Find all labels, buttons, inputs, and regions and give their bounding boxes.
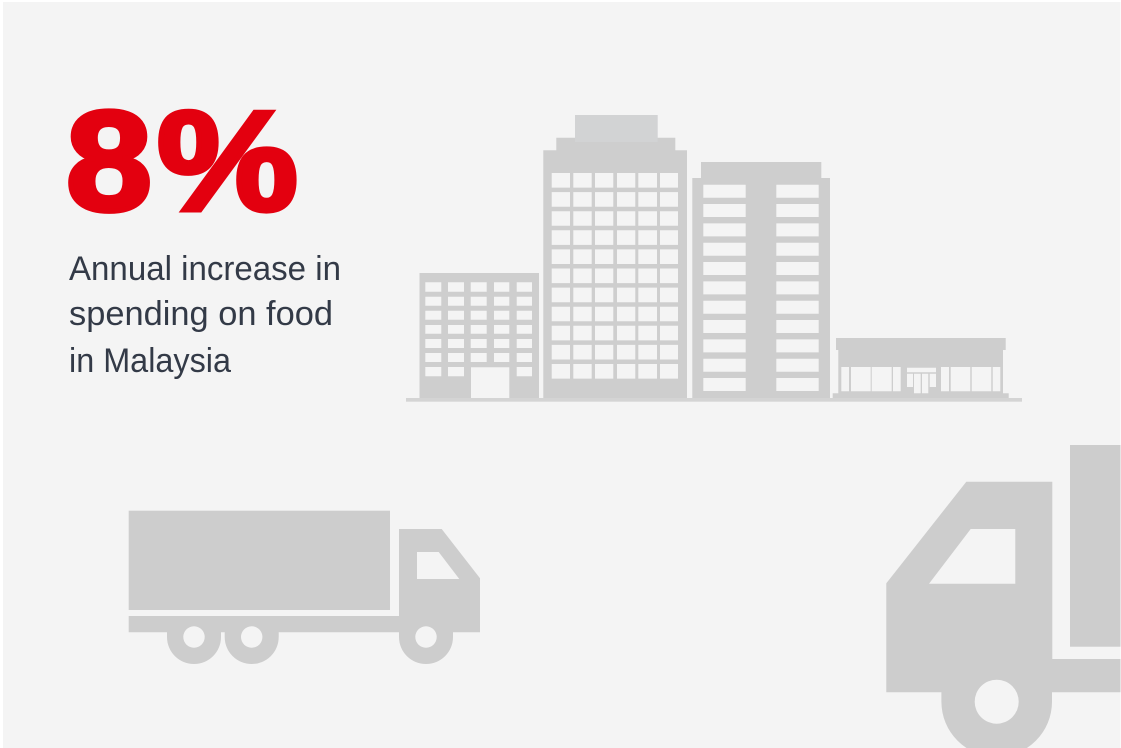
icon: enlarged truck cab cropped at the edge bbox=[886, 445, 1120, 748]
big number: 8%: 8 bbox=[66, 82, 152, 241]
building: shop bbox=[833, 338, 1009, 398]
text block: description: spending on food bbox=[69, 295, 333, 333]
icon: small delivery truck bbox=[129, 511, 480, 664]
cab and chassis bbox=[886, 482, 1120, 692]
building: right tower bbox=[692, 162, 830, 398]
text block: description bbox=[69, 250, 341, 380]
ground line bbox=[406, 398, 1022, 402]
cargo box bbox=[1070, 445, 1120, 647]
wheel hub bbox=[975, 680, 1019, 724]
text block: description: in Malaysia bbox=[69, 342, 231, 380]
truck cab and chassis bbox=[129, 529, 480, 632]
truck wheel hubs bbox=[183, 626, 437, 648]
building: central tower bbox=[543, 138, 687, 398]
icon: city buildings bbox=[406, 115, 1022, 402]
truck cargo box bbox=[129, 511, 390, 610]
truck wheels bbox=[167, 625, 453, 664]
building: left low-rise bbox=[420, 273, 539, 398]
big number: 8%: % bbox=[157, 82, 298, 241]
wheel bbox=[941, 685, 1052, 748]
text block: description: Annual increase in bbox=[69, 250, 341, 288]
tower rooftop bbox=[575, 115, 658, 142]
big number: 8% bbox=[66, 82, 298, 241]
